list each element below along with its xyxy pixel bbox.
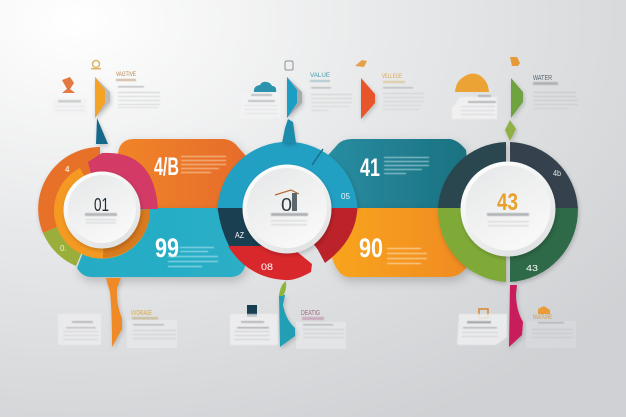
text box left [230, 314, 278, 345]
body lines: orange right panel [387, 248, 427, 264]
icon: roof [275, 190, 299, 195]
body text lines [383, 81, 424, 110]
body lines: dark teal panel [384, 157, 429, 174]
text: 90 panel: 90 [359, 233, 383, 263]
top callout 2 [240, 61, 352, 143]
ring segment: blue [218, 142, 357, 208]
text: 41 panel [360, 154, 429, 182]
heading: NVATURE [533, 315, 552, 321]
fold: crimson ribbon [509, 285, 523, 347]
top callout 4 [452, 57, 578, 141]
fold: amber arrow [95, 77, 110, 118]
ring segment: slate left [438, 142, 506, 208]
icon: house [538, 306, 550, 314]
ring segment: dark green [510, 208, 578, 282]
icon: orange figure [62, 77, 75, 93]
icon: dark file [247, 305, 257, 317]
bottom callout 3 [457, 285, 576, 348]
text box left [457, 314, 507, 345]
ring slit [312, 149, 323, 165]
body text lines [310, 80, 352, 111]
dart: teal [96, 118, 108, 144]
dart: teal [282, 119, 296, 143]
ring segment: navy [218, 208, 287, 246]
top callout 3 [355, 60, 424, 119]
ring segment: red [228, 246, 312, 280]
text box left [452, 95, 497, 119]
number: 01: 01 [94, 195, 109, 215]
chart: middle ring [218, 142, 357, 280]
text box right [296, 322, 346, 349]
body text lines [302, 317, 344, 338]
fold: orange ribbon [106, 278, 122, 347]
ring segment: lime [438, 208, 506, 282]
number: 43: 43 [497, 189, 518, 216]
top callout 1 [53, 60, 160, 144]
heading: VELLEGE [382, 74, 402, 80]
body lines: orange panel [181, 156, 226, 173]
heading: VVORIAGE [131, 310, 152, 317]
text: 99 panel [155, 233, 218, 267]
icon: column [292, 193, 297, 211]
number: 01: 0 [281, 195, 292, 215]
icon: orange frame [479, 309, 488, 318]
text box left [53, 98, 87, 116]
ring segment: green [43, 209, 100, 266]
text box right [127, 320, 177, 348]
dart: green [505, 120, 516, 141]
text box left [58, 314, 101, 345]
caption lines [487, 213, 529, 226]
text: 90 panel [359, 233, 427, 264]
fold: red-orange arrow [361, 78, 375, 119]
text: 4/B panel: 4/B [154, 153, 179, 181]
heading: water: WATER [533, 75, 552, 82]
text: 41 panel: 41 [360, 154, 380, 182]
ring label: green: 0. [60, 244, 67, 253]
ring label: 43: 43 [526, 264, 539, 273]
ring segment: dark red [287, 208, 357, 263]
panel: teal bottom-left band [77, 208, 246, 277]
ring segment: orange [38, 147, 100, 233]
fold: blue arrow [287, 77, 302, 118]
body text lines [116, 79, 160, 108]
bottom callout 2 [230, 281, 346, 349]
icon: small orange mark [510, 57, 520, 66]
panel: orange top-left band [118, 139, 246, 208]
heading: DEATIG [301, 310, 320, 317]
icon: small gold badge [91, 60, 101, 70]
chart: right ring [438, 142, 578, 282]
icon: cloud [254, 82, 276, 92]
heading: VALUE [310, 73, 330, 79]
ring label: 4b: 4b [553, 169, 561, 178]
panel: orange bottom-right band [332, 208, 470, 277]
body text lines [533, 82, 578, 109]
ring label: 05: 05 [341, 192, 351, 201]
caption lines [271, 213, 308, 226]
ring segment: slate right [510, 142, 578, 208]
ring label: AZ: AZ [235, 231, 244, 240]
text box right [526, 321, 576, 348]
ring label: 08: 08 [261, 262, 273, 272]
heading: vagtive: VAGTIVE [116, 72, 136, 78]
panel: dark teal top-right band [322, 139, 472, 208]
body lines: teal panel [168, 247, 218, 267]
ring segment: pink [88, 153, 158, 209]
inner ring: amber [54, 168, 150, 259]
fold: green arrow [511, 78, 523, 118]
body text lines [532, 322, 573, 338]
ring label: small A: 4 [65, 165, 70, 174]
text box left [240, 93, 280, 118]
fold: teal ribbon [279, 295, 295, 347]
icon: cylinder [285, 61, 293, 70]
body text lines [132, 317, 176, 339]
bottom callout 1 [58, 278, 177, 348]
dart: green leaf [279, 281, 286, 296]
icon: small orange hand [355, 60, 367, 67]
caption lines [85, 213, 117, 224]
text: 4/B panel [154, 153, 226, 181]
icon: hard hat [455, 74, 489, 92]
text: 99 panel: 99 [155, 233, 179, 263]
chart: left ring [38, 147, 158, 266]
